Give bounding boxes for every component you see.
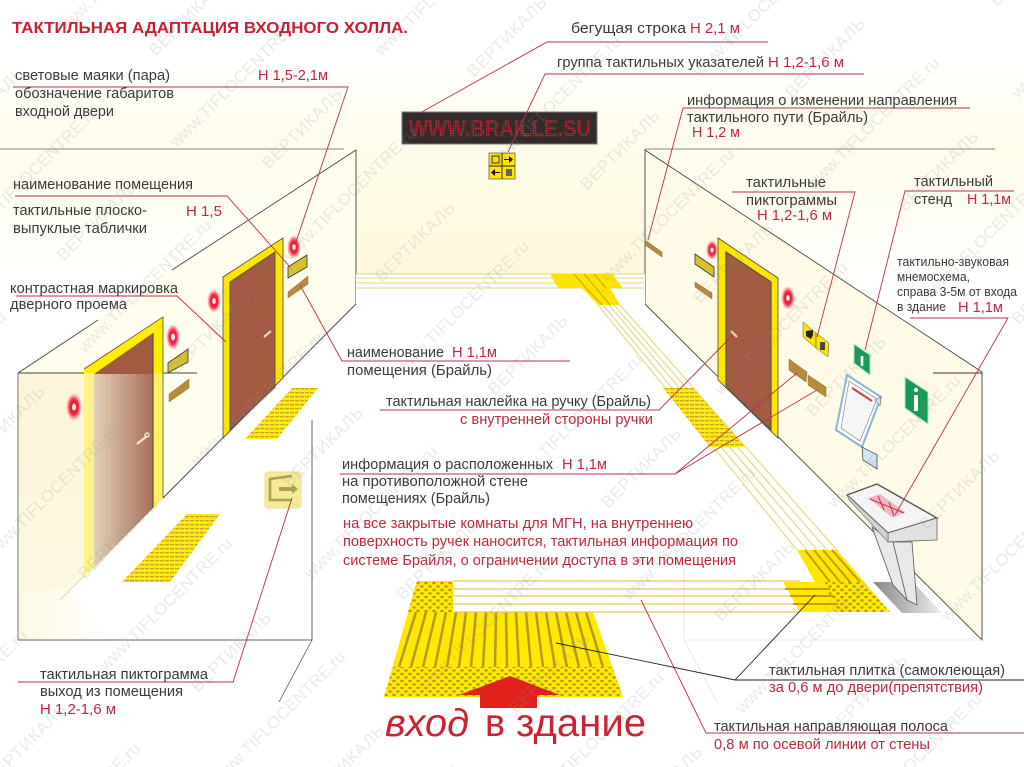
label: direction change information: Н 1,2 м — [692, 125, 740, 141]
label: door contrast marking: дверного проема — [10, 297, 128, 313]
exit pictogram — [265, 472, 301, 508]
entrance caption — [385, 702, 646, 745]
red note: на все закрытые комнаты для МГН, на внутреннею — [343, 516, 693, 532]
group of tactile indicators — [489, 153, 515, 179]
label: tactile tile: тактильная плитка (самоклеющая) — [769, 663, 1005, 679]
label: tactile stand — [914, 174, 1011, 208]
label: tactile guide strip — [714, 719, 949, 753]
tactile guide strips: horizontal — [453, 581, 800, 612]
title: ТАКТИЛЬНАЯ АДАПТАЦИЯ ВХОДНОГО ХОЛЛА. — [12, 20, 408, 37]
label: tactile pictograms: пиктограммы — [746, 193, 837, 209]
label: light beacons: световые маяки (пара) — [15, 68, 170, 84]
label: tactile-sound mnemonic scheme — [897, 255, 1017, 316]
label: tactile indicators: группа тактильных указателей — [557, 55, 764, 71]
entrance tactile mat — [384, 581, 623, 697]
label: tactile stand: тактильный — [914, 174, 993, 190]
label: opposite wall information: на противоположной стене — [342, 474, 528, 490]
panel: left wall — [0, 149, 356, 702]
label: light beacons: Н 1,5-2,1м — [258, 68, 328, 84]
light beacons — [66, 235, 795, 421]
entrance arrow — [459, 676, 560, 708]
right door — [718, 238, 778, 438]
label: handle sticker: тактильная наклейка на ручку (Брайль) — [386, 394, 651, 410]
label: tactile guide strip: тактильная направляющая полоса — [714, 719, 949, 735]
label: light beacons: входной двери — [15, 104, 114, 120]
label: running text: Н 2,1 м — [690, 21, 740, 37]
label: room name plaques: Н 1,5 — [186, 204, 222, 220]
green information signs — [854, 344, 928, 424]
label: opposite wall information: информация о расположенных — [342, 457, 554, 473]
label: room name braille: помещения (Брайль) — [347, 363, 492, 379]
label: door contrast marking — [10, 281, 179, 313]
entrance caption: вход — [385, 702, 469, 745]
red note — [343, 516, 738, 569]
label: light beacons: обозначение габаритов — [15, 86, 174, 102]
label: tactile stand: стенд — [914, 192, 953, 208]
label: room name plaques: наименование помещения — [13, 177, 193, 193]
label: running text — [571, 21, 740, 37]
LED running text sign: WWW.BRAILLE.SU — [409, 116, 591, 141]
label: opposite wall information: помещениях (Брайль) — [342, 491, 490, 507]
tactile kiosk — [847, 484, 942, 613]
label: opposite wall information: Н 1,1м — [562, 457, 607, 473]
far left door — [223, 238, 283, 438]
tactile floor mats, left side — [122, 388, 318, 582]
label: tactile guide strip: 0,8 м по осевой линии от стены — [714, 737, 930, 753]
entrance caption: здание — [516, 702, 646, 745]
label: handle sticker: с внутренней стороны ручки — [460, 412, 653, 428]
information stand — [836, 375, 881, 469]
label: tactile tile — [769, 663, 1005, 696]
entrance caption: в — [485, 702, 505, 745]
label: tactile pictograms: Н 1,2-1,6 м — [757, 208, 832, 224]
label: direction change information — [687, 93, 957, 141]
label: room name plaques: выпуклые таблички — [13, 221, 147, 237]
label: tactile pictograms: тактильные — [746, 175, 826, 191]
label: opposite wall information — [342, 457, 607, 507]
panel: right wall — [645, 149, 995, 702]
tactile plaques and braille plates — [168, 240, 826, 402]
label: room name braille: Н 1,1м — [452, 345, 497, 361]
label: tactile-sound mnemonic scheme: справа 3-5м от входа — [897, 285, 1017, 299]
label: handle sticker — [386, 394, 653, 428]
label: door contrast marking: контрастная маркировка — [10, 281, 179, 297]
label: exit pictogram: Н 1,2-1,6 м — [40, 702, 116, 718]
corner tactile mat — [783, 550, 890, 612]
label: room name plaques — [13, 177, 222, 237]
tactile guide strips: back and side — [356, 274, 837, 550]
label: tactile-sound mnemonic scheme: Н 1,1м — [958, 300, 1003, 316]
label: room name braille — [347, 345, 497, 379]
label: running text: бегущая строка — [571, 21, 687, 37]
label: direction change information: тактильного пути (Брайль) — [687, 110, 868, 126]
label: exit pictogram: выход из помещения — [40, 684, 183, 700]
near left door — [84, 317, 163, 577]
label: tactile indicators: Н 1,2-1,6 м — [768, 55, 844, 71]
label: tactile-sound mnemonic scheme: в здание — [897, 300, 946, 314]
label: tactile-sound mnemonic scheme: мнемосхема, — [897, 270, 970, 284]
back wall background — [0, 60, 1024, 285]
label: exit pictogram — [40, 667, 209, 718]
red note: поверхность ручек наносится, тактильная информация по — [343, 534, 738, 550]
label: exit pictogram: тактильная пиктограмма — [40, 667, 209, 683]
label: room name braille: наименование — [347, 345, 444, 361]
red note: системе Брайля, о ограничении доступа в эти помещения — [343, 553, 736, 569]
label: room name plaques: тактильные плоско- — [13, 203, 147, 219]
label: tactile tile: за 0,6 м до двери(препятствия) — [769, 680, 983, 696]
label: light beacons — [15, 68, 328, 120]
pictograms on right wall — [803, 322, 829, 357]
label: tactile pictograms — [746, 175, 837, 224]
label: tactile stand: Н 1,1м — [967, 192, 1011, 208]
label: tactile-sound mnemonic scheme: тактильно-звуковая — [897, 255, 1009, 269]
label: direction change information: информация о изменении направления — [687, 93, 957, 109]
